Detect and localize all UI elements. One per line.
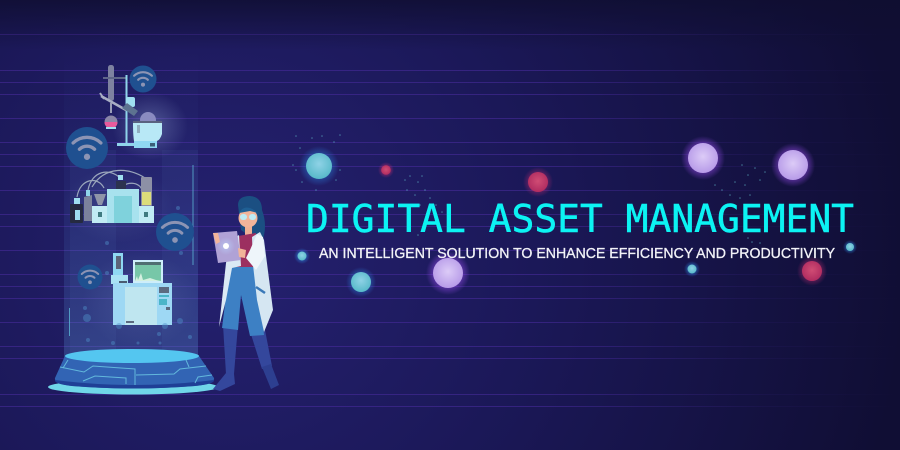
- title: DIGITAL ASSET MANAGEMENT: [306, 197, 854, 242]
- bubbles: [83, 206, 192, 345]
- pedestal platform: [48, 349, 218, 394]
- glass display column: [63, 50, 198, 360]
- icon: wifi small: [78, 264, 102, 290]
- subtitle: AN INTELLIGENT SOLUTION TO ENHANCE EFFICIENCY AND PRODUCTIVITY: [319, 246, 835, 262]
- gas chromatograph instrument: [111, 253, 172, 325]
- rotary evaporator: [100, 65, 162, 148]
- icon: wifi top: [130, 66, 156, 92]
- lab apparatus with tubes: [70, 170, 154, 223]
- icon: wifi large: [66, 127, 108, 169]
- glowing spheres: [294, 136, 857, 297]
- scientist with tablet: [213, 196, 279, 391]
- speckle clouds: [292, 134, 766, 244]
- icon: wifi right: [156, 213, 194, 251]
